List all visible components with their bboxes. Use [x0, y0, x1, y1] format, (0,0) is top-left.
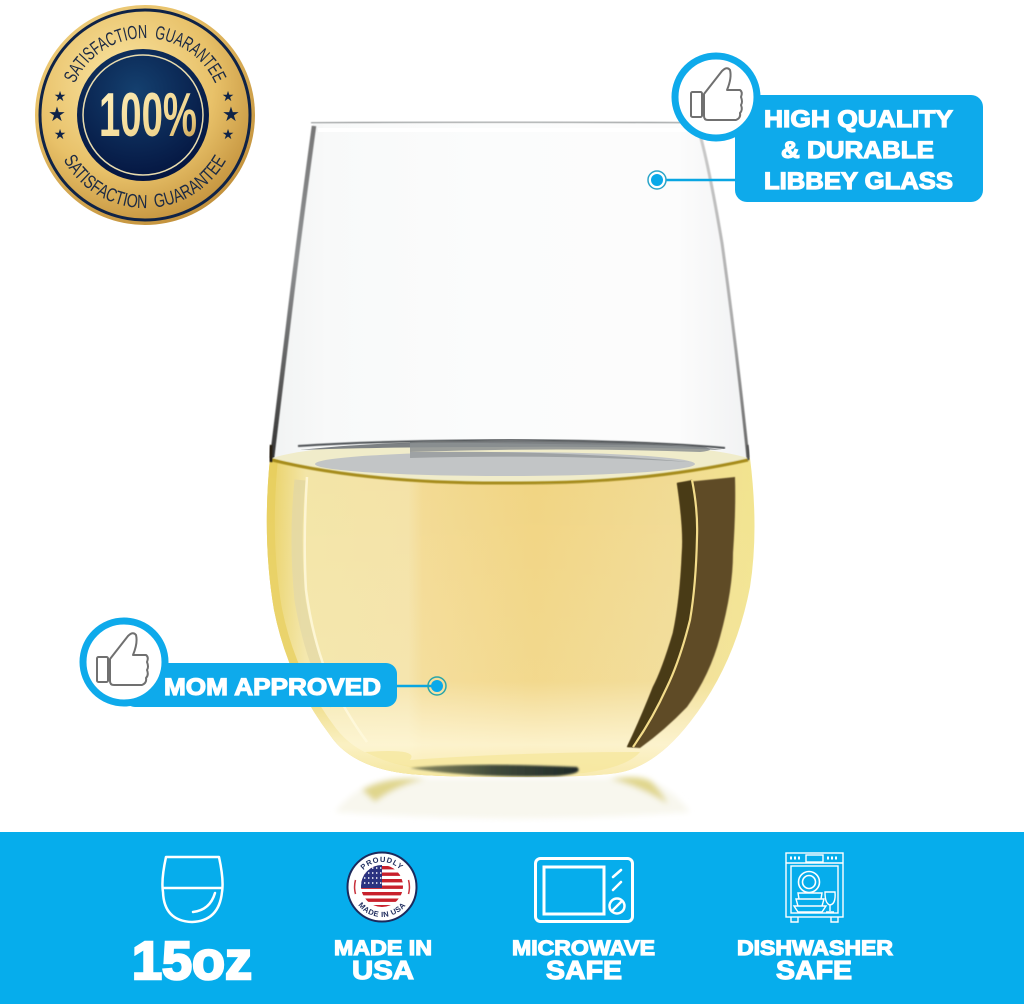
callout text: & DURABLE: [781, 137, 934, 164]
made in usa label: MADE IN: [334, 937, 432, 960]
badge percent: 100%: [99, 81, 197, 150]
gold line in dark band: [633, 480, 697, 747]
icon: thumbs up: [97, 633, 148, 685]
icon: microwave: [536, 858, 632, 922]
badge top text: SATISFACTION GUARANTEE: [64, 25, 227, 84]
panel: feature band: [0, 832, 1024, 1004]
badge stars: ★: [222, 102, 240, 126]
dark meniscus right: [747, 445, 749, 460]
15oz label: 15oz: [132, 931, 252, 991]
feature: dishwasher safe: [737, 853, 893, 985]
microwave label: [512, 937, 655, 985]
microwave label: MICROWAVE: [512, 937, 655, 960]
callout: high quality: [648, 56, 983, 202]
made in usa label: [334, 937, 432, 985]
icon: usa seal: MADE IN USA: [358, 902, 406, 917]
wine surface: [272, 440, 748, 484]
badge stars: ★: [54, 127, 66, 143]
icon: usa seal: [346, 852, 418, 922]
wine glass photo: [263, 122, 754, 780]
badge stars: [48, 89, 240, 143]
callout text: LIBBEY GLASS: [764, 168, 953, 195]
upper empty glass: [270, 124, 748, 460]
badge bottom text: SATISFACTION GUARANTEE: [64, 154, 226, 208]
wine body: [267, 458, 754, 777]
badge dark ring: [40, 10, 250, 220]
callout box: [124, 663, 397, 707]
feature: made in usa: [334, 852, 432, 985]
feature: 15oz: [132, 857, 252, 991]
reflection under glass: [335, 777, 690, 818]
icon: dishwasher: [786, 853, 843, 922]
dishwasher label: DISHWASHER: [737, 937, 893, 960]
callout dot: [648, 171, 666, 189]
badge navy centre: [77, 49, 209, 181]
icon: thumbs up: [691, 68, 742, 120]
dark band right: [627, 477, 735, 748]
callout: mom approved: [83, 621, 446, 707]
right glass edge: [698, 128, 748, 458]
feature: microwave safe: [512, 858, 655, 985]
badge stars: ★: [222, 127, 234, 143]
dark meniscus left: [270, 445, 272, 462]
left glass edge: [272, 126, 314, 458]
glass rim: [311, 122, 698, 135]
callout box: [735, 95, 983, 202]
icon: glass outline: [162, 857, 223, 922]
callout icon circle: [83, 621, 165, 703]
callout icon circle: [675, 56, 757, 138]
badge inner line: [83, 55, 203, 175]
microwave label: SAFE: [546, 955, 622, 985]
badge stars: ★: [54, 89, 66, 105]
darker inner band: [627, 480, 697, 747]
wine fade to bottom: [267, 458, 754, 777]
callout text: [764, 106, 953, 195]
made in usa label: USA: [352, 955, 414, 985]
icon: usa seal: PROUDLY: [360, 856, 404, 870]
badge stars: ★: [48, 102, 66, 126]
badge gold disc: [35, 5, 255, 225]
wine surface front edge: [272, 460, 748, 483]
yellow outer wall: [263, 458, 470, 780]
callout leader line: [664, 179, 740, 181]
callout text: MOM APPROVED: [164, 674, 381, 701]
callout dot: [428, 677, 446, 695]
badge: satisfaction guarantee: [35, 5, 255, 225]
dishwasher label: SAFE: [776, 955, 852, 985]
badge stars: ★: [222, 89, 234, 105]
glass base: [365, 751, 640, 777]
callout text: HIGH QUALITY: [764, 106, 953, 133]
dishwasher label: [737, 937, 893, 985]
callout leader line: [395, 685, 432, 687]
